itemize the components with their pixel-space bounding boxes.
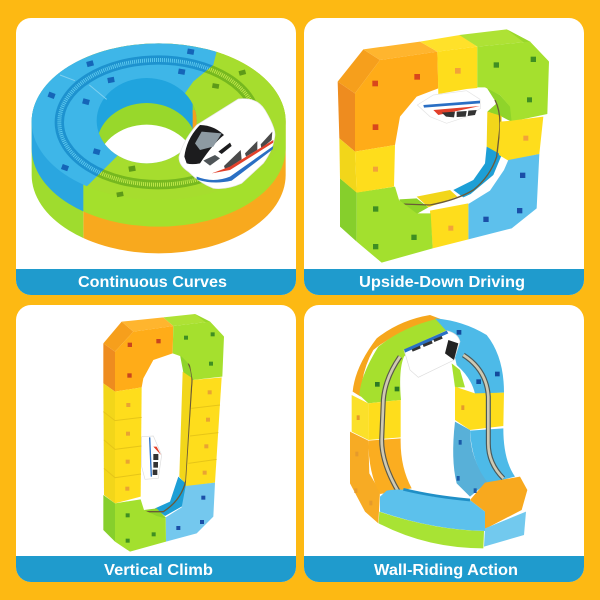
yellow right block: [455, 387, 504, 430]
panel card: [304, 18, 584, 295]
inner track rail: [145, 363, 192, 512]
peg holes: [48, 48, 246, 197]
panel: vertical climb: [16, 305, 296, 582]
train: [417, 91, 481, 123]
yellow bottom block: [430, 203, 468, 248]
yellow right block: [499, 117, 543, 161]
panel card: [16, 305, 296, 582]
caption text: Upside-Down Driving: [359, 274, 525, 291]
caption text: Vertical Climb: [104, 562, 213, 579]
panel: upside-down driving: [304, 18, 584, 295]
ring top face: [32, 43, 286, 200]
green arch: [359, 319, 450, 403]
circular track illustration: [32, 43, 286, 253]
caption banner: [16, 269, 296, 295]
segment seams: [60, 75, 107, 99]
bottom light blue segment: [484, 512, 526, 547]
panel: wall-riding action: [304, 305, 584, 582]
yellow left block: [352, 395, 401, 440]
left track rail: [382, 357, 400, 492]
lower ring layer: [32, 43, 286, 253]
upper ring layer: [32, 43, 286, 227]
blue arch: [435, 318, 504, 394]
ring inner hole: [96, 78, 197, 164]
green corner block bottom: [103, 495, 166, 552]
peg holes: [372, 57, 536, 249]
caption text: Continuous Curves: [78, 274, 227, 291]
yellow left block: [339, 138, 395, 193]
yellow top block: [420, 35, 477, 94]
panel card: [16, 18, 296, 295]
wall-riding track illustration: [350, 315, 527, 548]
blue corner block: [166, 483, 215, 542]
train: [404, 331, 460, 377]
yellow right column: [186, 377, 222, 487]
inner track faces: [399, 88, 513, 214]
bottom blue segment: [380, 489, 485, 531]
caption banner: [304, 269, 584, 295]
peg holes: [125, 332, 215, 543]
orange corner block: [338, 42, 438, 152]
train: [142, 436, 162, 479]
train: [179, 99, 275, 189]
orange corner block: [103, 317, 173, 392]
ring groove track: [59, 60, 257, 185]
tall loop track illustration: [103, 314, 224, 552]
inner green strip behind blue arch: [452, 363, 465, 387]
yellow left column: [103, 383, 142, 503]
bottom green segment: [379, 512, 484, 548]
panel: continuous curves: [16, 18, 296, 295]
caption banner: [304, 556, 584, 582]
blue right curve: [453, 422, 515, 497]
green corner block bottom: [340, 178, 433, 263]
inner track faces: [144, 355, 194, 518]
green corner block: [163, 314, 224, 380]
square loop track illustration: [338, 29, 549, 263]
orange outer arch band: [353, 315, 442, 397]
left track rail highlight: [382, 357, 400, 492]
right track rail highlight: [463, 355, 503, 478]
blue corner block: [468, 154, 539, 239]
orange left curve: [350, 432, 412, 523]
panel card: [304, 305, 584, 582]
caption banner: [16, 556, 296, 582]
caption text: Wall-Riding Action: [374, 562, 518, 579]
peg holes: [354, 330, 500, 505]
inner track rail: [402, 100, 500, 205]
green corner block: [459, 29, 549, 122]
bottom orange segment: [470, 477, 527, 529]
right track rail: [463, 355, 503, 478]
